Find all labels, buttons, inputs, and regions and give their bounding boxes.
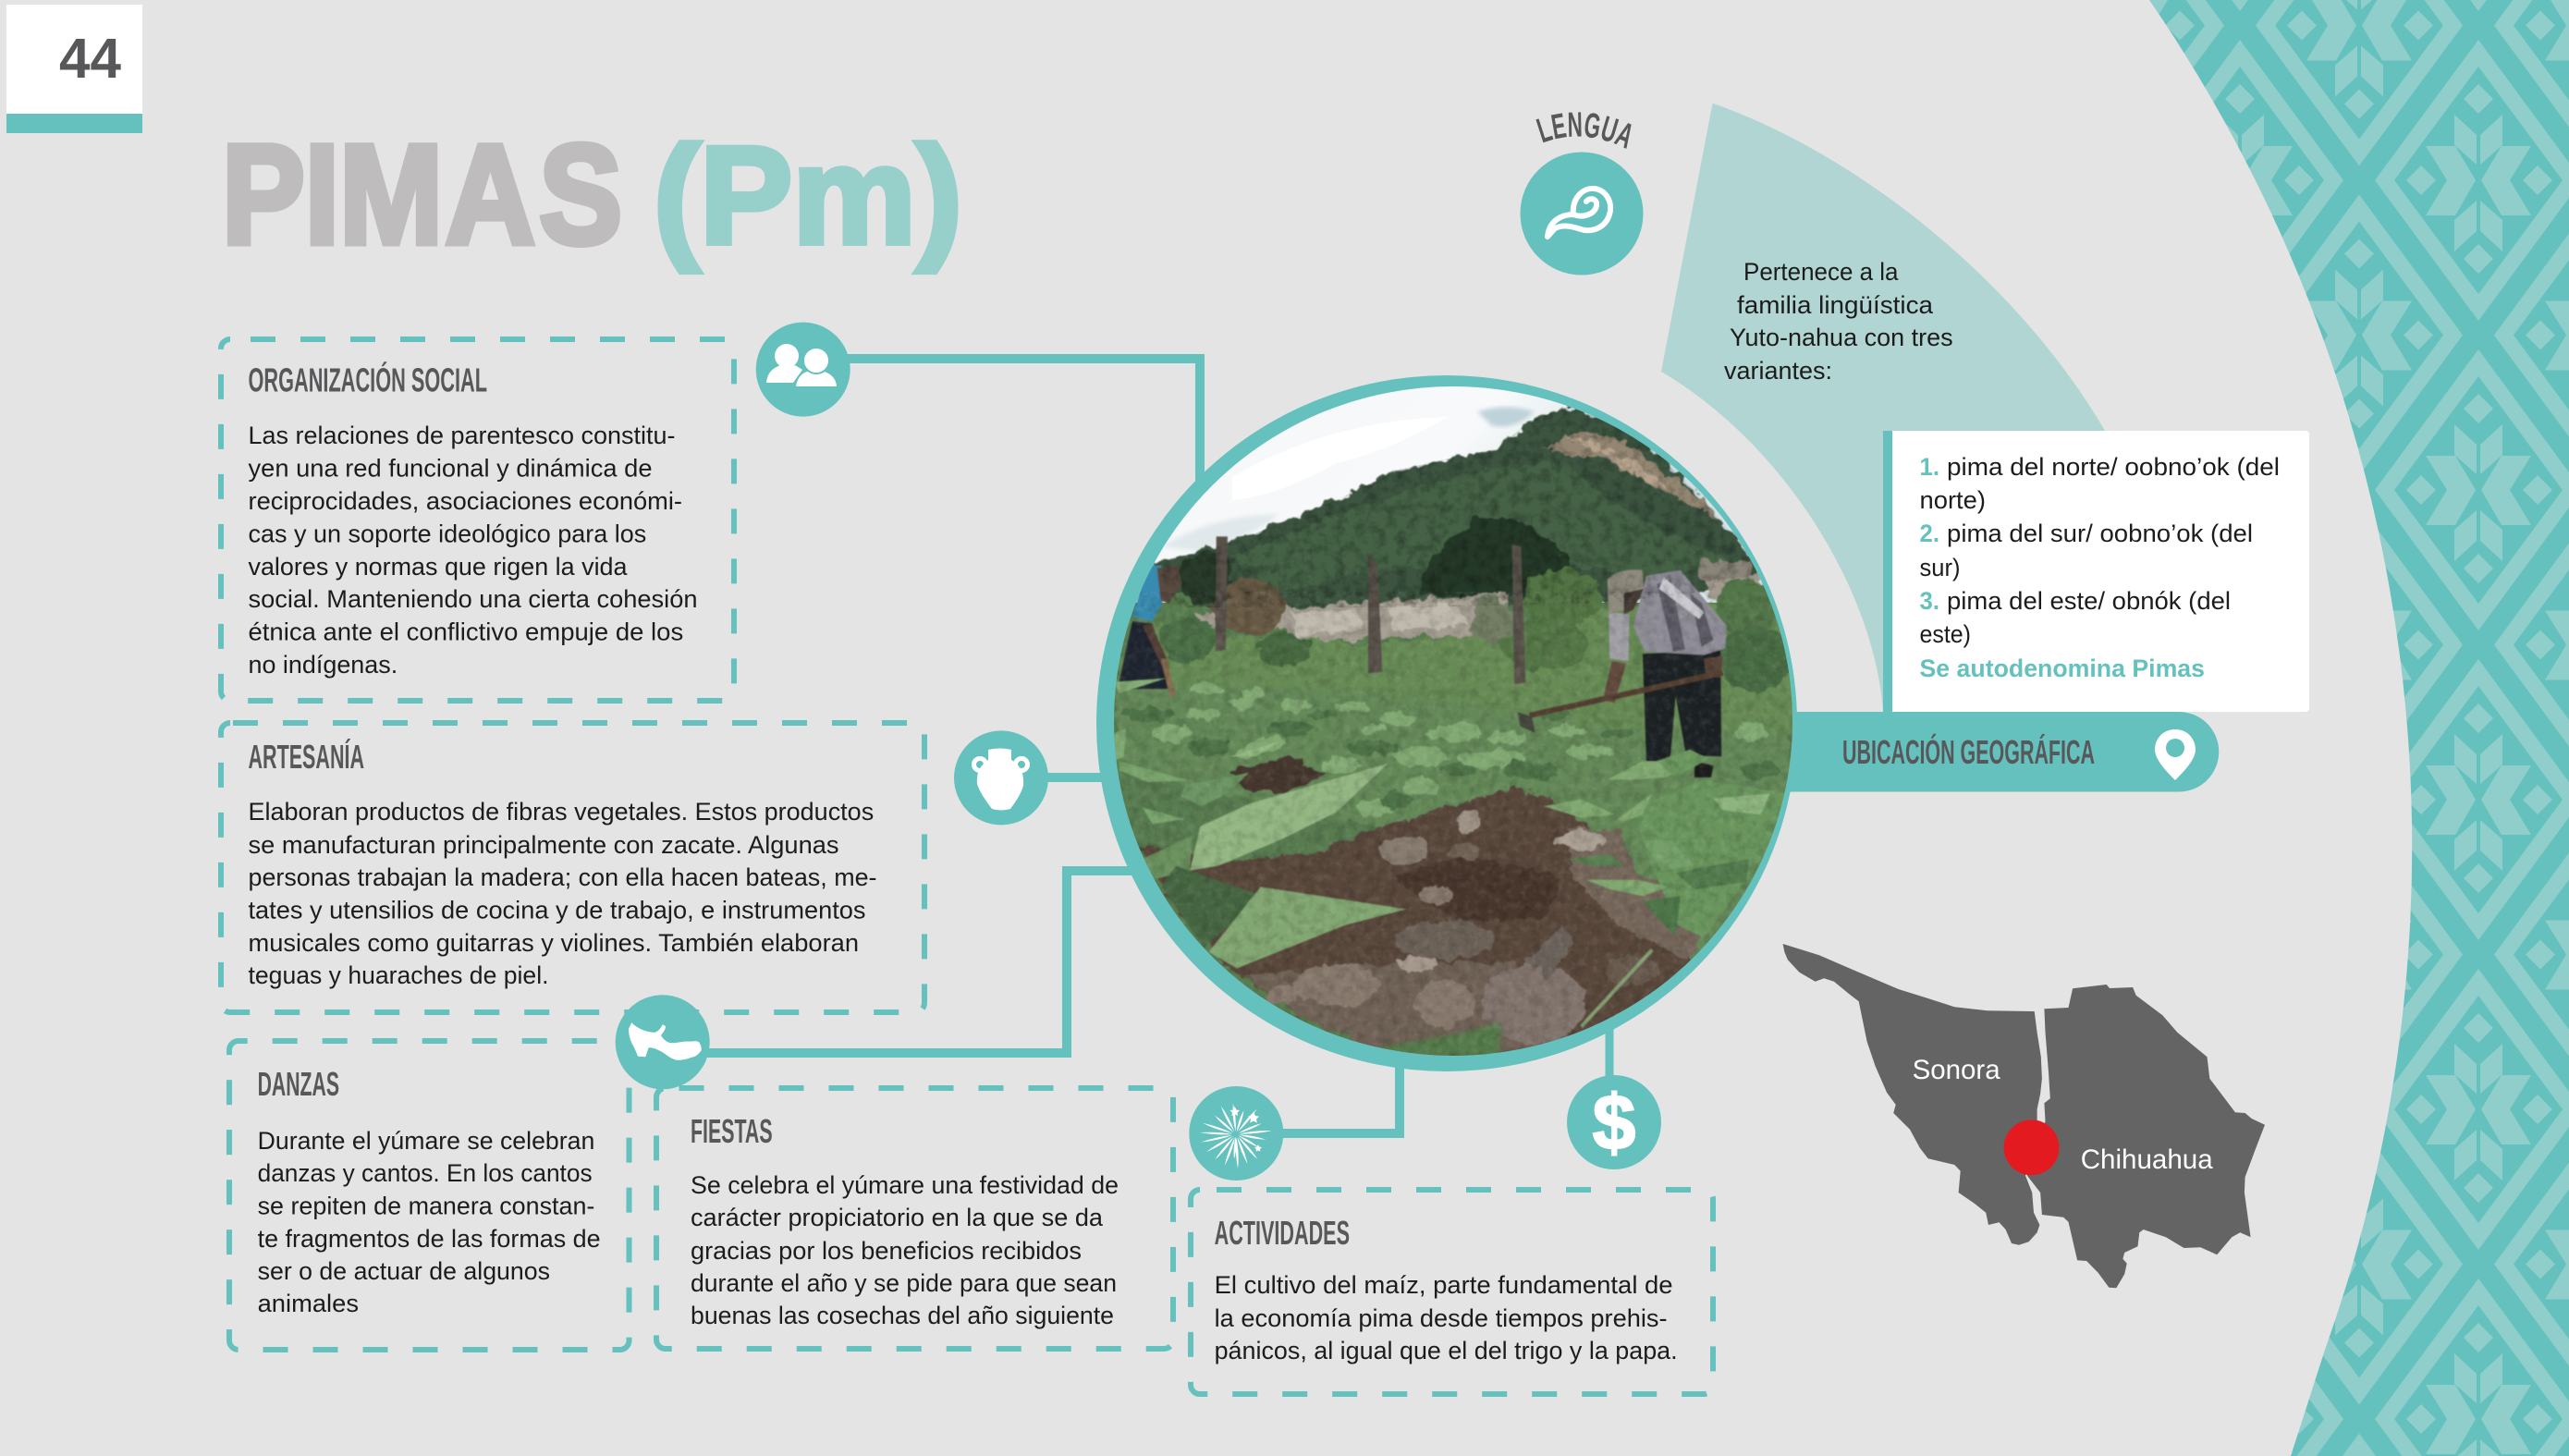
icon: dollar — [1567, 1075, 1661, 1169]
page number tab — [6, 5, 142, 133]
panel: fiestas: carácter propiciatorio en la que se da — [691, 1204, 1104, 1231]
title: PIMAS — [222, 116, 622, 274]
stones — [1266, 810, 1661, 1043]
panel: artesanía: se manufacturan principalmente con zacate. Algunas — [248, 831, 838, 859]
foreground leaves left — [1119, 761, 1190, 782]
hill — [1152, 407, 1766, 607]
grass band — [1115, 603, 1798, 733]
language description text — [1724, 258, 1953, 385]
wall — [1194, 593, 1511, 642]
panel: actividades: ACTIVIDADES — [1215, 1214, 1350, 1252]
title — [222, 116, 962, 274]
panel: fiestas: buenas las cosechas del año siguiente — [691, 1302, 1114, 1329]
panel: organización social: valores y normas que rigen la vida — [248, 553, 628, 581]
panel: danzas: DANZAS — [258, 1065, 339, 1103]
panel: actividades — [1191, 1190, 1713, 1394]
panel: artesanía: Elaboran productos de fibras vegetales. Estos productos — [248, 798, 874, 826]
panel: danzas: ser o de actuar de algunos — [258, 1257, 550, 1285]
panel: organización social: ORGANIZACIÓN SOCIAL — [248, 361, 487, 399]
map: Sonora and Chihuahua: Chihuahua — [2081, 1144, 2213, 1175]
panel: organización social: reciprocidades, asociaciones económi- — [248, 487, 682, 515]
panel: organización social: Las relaciones de parentesco constitu- — [248, 422, 675, 449]
panel: artesanía: teguas y huaraches de piel. — [248, 961, 549, 989]
white list panel: norte) — [1919, 486, 1986, 514]
title: (Pm) — [654, 117, 962, 273]
white list panel: pima del norte/ oobno’ok (del — [1947, 453, 2280, 481]
location bar: UBICACIÓN GEOGRÁFICA — [1842, 732, 2095, 771]
icon: dollar: $ — [1593, 1079, 1635, 1166]
panel: artesanía — [221, 723, 924, 1012]
panel: artesanía: musicales como guitarras y violines. También elaboran — [248, 929, 859, 957]
white list panel: sur) — [1919, 554, 1960, 581]
language description text: Yuto-nahua con tres — [1730, 324, 1953, 351]
foreground leaves right — [1633, 779, 1789, 938]
page number tab: 44 — [59, 27, 121, 90]
panel: actividades: El cultivo del maíz, parte fundamental de — [1215, 1271, 1673, 1299]
white list panel: este) — [1919, 620, 1971, 648]
panel: artesanía: tates y utensilios de cocina y de trabajo, e instrumentos — [248, 897, 865, 924]
background pattern panel — [2149, 0, 2569, 1456]
panel: organización social: social. Manteniendo una cierta cohesión — [248, 585, 697, 613]
panel: danzas: Durante el yúmare se celebran — [258, 1127, 594, 1155]
panel: organización social: cas y un soporte ideológico para los — [248, 520, 646, 547]
connector lines — [707, 359, 1609, 1133]
photo ring — [1096, 375, 1797, 1071]
photo: farmers in field — [1114, 386, 1792, 1056]
panel: artesanía: personas trabajan la madera; con ella hacen bateas, me- — [248, 863, 876, 891]
panel: danzas: danzas y cantos. En los cantos — [258, 1159, 593, 1187]
icon: fireworks — [1189, 1086, 1283, 1181]
language sector — [1661, 104, 2108, 721]
icon: people — [756, 323, 850, 417]
panel: organización social: no indígenas. — [248, 651, 398, 679]
white list panel: 3. — [1919, 587, 1939, 615]
language description text: familia lingüística — [1737, 291, 1934, 319]
language description text: variantes: — [1724, 357, 1832, 385]
map: Sonora and Chihuahua — [1783, 944, 2265, 1288]
panel: danzas: se repiten de manera constan- — [258, 1193, 594, 1220]
white list panel: Se autodenomina Pimas — [1919, 655, 2205, 682]
panel: organización social: yen una red funcional y dinámica de — [248, 454, 653, 482]
language description text: Pertenece a la — [1743, 258, 1899, 286]
white list panel: 1. — [1919, 453, 1939, 481]
white list panel — [1883, 431, 2309, 712]
panel: organización social — [221, 339, 734, 701]
panel: actividades: la economía pima desde tiempos prehis- — [1215, 1304, 1668, 1332]
white list panel: pima del sur/ oobno’ok (del — [1947, 520, 2253, 547]
panel: actividades: pánicos, al igual que el del trigo y la papa. — [1215, 1337, 1678, 1364]
icon: language — [1520, 152, 1644, 275]
left farmer — [1119, 621, 1168, 689]
panel: danzas — [229, 1041, 629, 1350]
soil — [1138, 787, 1699, 1055]
panel: fiestas: FIESTAS — [691, 1112, 773, 1150]
icon: shoe — [616, 995, 710, 1089]
panel: danzas: te fragmentos de las formas de — [258, 1225, 601, 1253]
panel: artesanía: ARTESANÍA — [248, 738, 364, 776]
language heading — [1536, 112, 1632, 149]
field of leaves — [1115, 687, 1792, 966]
panel: organización social: étnica ante el conflictivo empuje de los — [248, 618, 683, 645]
panel: fiestas — [656, 1088, 1173, 1349]
panel: fiestas: Se celebra el yúmare una festividad de — [691, 1171, 1119, 1199]
right farmer — [1643, 649, 1721, 761]
panel: fiestas: durante el año y se pide para que sean — [691, 1269, 1117, 1297]
fence posts — [1216, 536, 1525, 684]
map: Sonora and Chihuahua: Sonora — [1913, 1055, 2000, 1085]
white list panel: pima del este/ obnók (del — [1947, 587, 2231, 615]
language heading: LENGUA — [1536, 112, 1632, 149]
icon: jar — [954, 730, 1048, 825]
panel: danzas: animales — [258, 1290, 359, 1317]
panel: fiestas: gracias por los beneficios recibidos — [691, 1237, 1082, 1265]
location bar — [1784, 712, 2219, 791]
white list panel: 2. — [1919, 520, 1939, 547]
